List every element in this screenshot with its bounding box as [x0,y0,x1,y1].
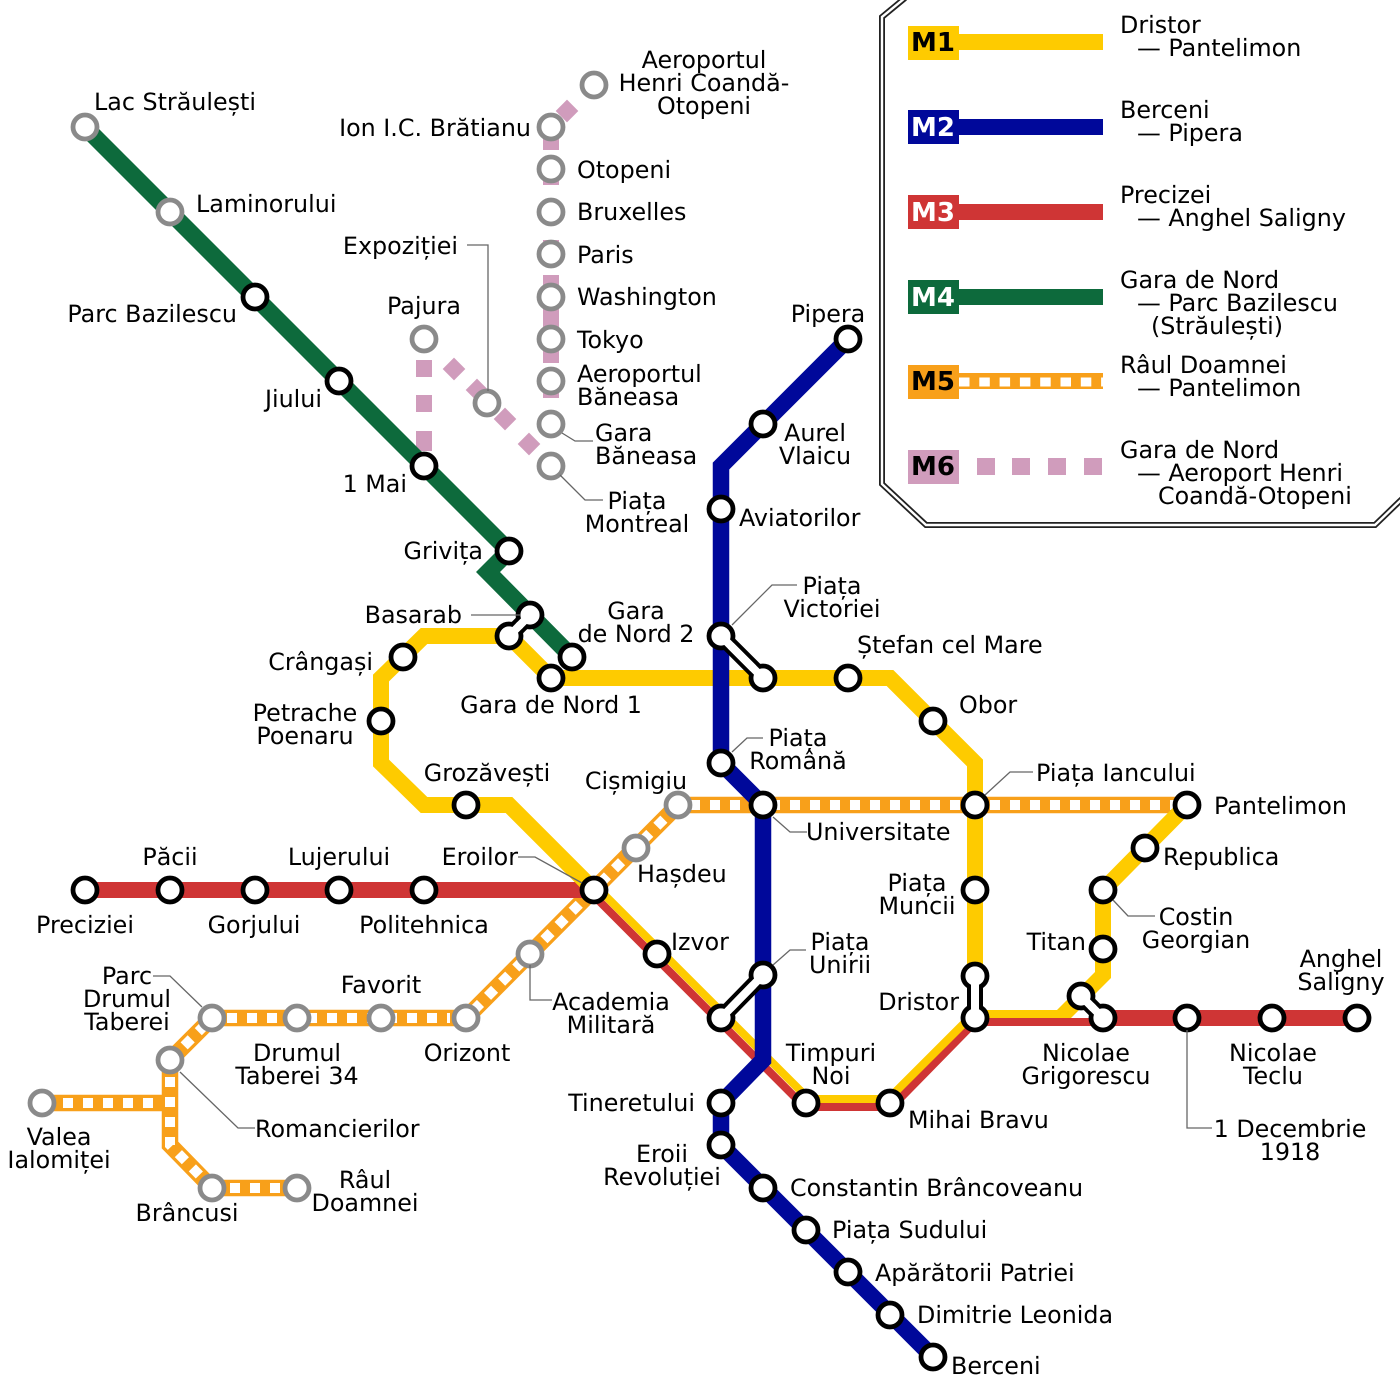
label: Ștefan cel Mare: Ștefan cel Mare [857,631,1043,659]
label: Costin Georgian [1113,900,1250,954]
label: Parc Drumul Taberei: Parc [102,962,152,990]
label: Otopeni: Otopeni [577,156,671,184]
inner fill for interchange connectors [509,615,1103,1018]
label: Romancierilor [180,1072,420,1143]
label: Piața Muncii: Piața [888,869,946,897]
label: Bruxelles: Bruxelles [577,198,686,226]
label: Aviatorilor: Aviatorilor [739,504,861,532]
legend row: M6: — Aeroport Henri [1137,459,1343,487]
label: Washington: Washington [577,283,717,311]
label: Basarab: Basarab [365,601,462,629]
label: 1 Mai: 1 Mai [343,470,407,498]
label: Academia Militară: Academia [552,988,670,1016]
legend row: M3 [908,181,1346,232]
legend row: M1 [908,11,1301,62]
label: Râul Doamnei: Râul [339,1166,391,1194]
label: Lujerului: Lujerului [288,843,390,871]
label: Dristor: Dristor [878,988,959,1016]
label: Piața Română [732,724,847,775]
label: Pajura: Pajura [387,292,461,320]
label: Crângași: Crângași [268,648,373,676]
label: Nicolae Teclu: Teclu [1242,1062,1303,1090]
label: Republica: Republica [1163,843,1279,871]
legend row: M5: M5 [911,367,955,397]
label: Piața Sudului: Piața Sudului [832,1216,987,1244]
label: Ion I.C. Brătianu: Ion I.C. Brătianu [339,114,531,142]
label: Piața Română: Piața [769,724,827,752]
legend row: M1: M1 [911,28,955,58]
label: Drumul Taberei 34: Drumul [253,1039,341,1067]
legend row: M6: M6 [911,452,955,482]
label: Aurel Vlaicu: Vlaicu [779,442,851,470]
legend row: M6: Gara de Nord [1120,436,1279,464]
legend border (double line) [882,0,1400,525]
label: Gara de Nord 2: de Nord 2 [578,620,694,648]
label: Grivița: Grivița [404,537,483,565]
label: Hașdeu: Hașdeu [637,860,727,888]
label: Piața Unirii [773,928,871,979]
legend row: M5: — Pantelimon [1137,374,1301,402]
line M4 (green) [85,127,572,657]
line M6 (pink, planned) [416,100,578,455]
stations: M4 (black) [243,285,584,669]
legend row: M4: — Parc Bazilescu [1137,289,1338,317]
label: Cișmigiu: Cișmigiu [585,767,687,795]
label: Gara de Nord 2: Gara [607,597,665,625]
label: Nicolae Grigorescu: Grigorescu [1022,1062,1150,1090]
panel: legend [882,0,1400,525]
label: Petrache Poenaru: Poenaru [256,722,354,750]
line M1 shared section (yellow) [597,887,973,1099]
line M2 (blue) [721,339,933,1357]
label: Laminorului: Laminorului [196,190,336,218]
label: Romancierilor: Romancierilor [255,1115,420,1143]
label: Eroilor: Eroilor [442,843,518,871]
label: Obor: Obor [959,691,1017,719]
label: Orizont: Orizont [424,1039,510,1067]
label: Gara de Nord 1: Gara de Nord 1 [460,691,642,719]
label: Constantin Brâncoveanu: Constantin Brâncoveanu [790,1174,1083,1202]
label: Aeroportul Băneasa: Băneasa [577,383,679,411]
label: Gara Băneasa [562,419,697,470]
label: Pantelimon: Pantelimon [1214,792,1347,820]
legend row: M5 [908,351,1301,402]
label: Drumul Taberei 34: Taberei 34 [234,1062,359,1090]
legend row: M4: Gara de Nord [1120,266,1279,294]
label: Grozăvești: Grozăvești [424,759,550,787]
legend row: M2: — Pipera [1137,119,1243,147]
legend row: M2: M2 [911,113,955,143]
line M3 (red) [85,890,1357,1018]
label: Aeroportul Băneasa: Aeroportul [577,360,702,388]
legend row: M4: M4 [911,283,955,313]
label: Anghel Saligny: Saligny [1297,968,1385,996]
stations: M3 (black) [73,878,1369,1115]
label: Piața Română: Română [749,747,847,775]
label: Academia Militară [530,965,670,1039]
legend row: M2: Berceni [1120,96,1210,124]
label: Timpuri Noi: Noi [812,1062,850,1090]
label: Piața Iancului: Piața Iancului [1036,759,1196,787]
label: 1 Decembrie 1918 [1187,1030,1366,1166]
label: Gara Băneasa: Băneasa [595,442,697,470]
label: Academia Militară: Militară [567,1011,655,1039]
legend row: M4: (Străulești) [1151,312,1283,340]
label: Nicolae Grigorescu: Nicolae [1042,1039,1130,1067]
label: Parc Drumul Taberei: Drumul [83,985,171,1013]
label: Timpuri Noi: Timpuri [785,1039,876,1067]
label: Tineretului: Tineretului [567,1089,695,1117]
label: Gara Băneasa: Gara [595,419,652,447]
label: Politehnica: Politehnica [359,911,489,939]
line M5 (orange, striped) [42,805,1187,1188]
label: Lac Străulești: Lac Străulești [94,88,256,116]
legend row: M6: Coandă-Otopeni [1158,482,1352,510]
label: Valea Ialomiței: Ialomiței [7,1146,111,1174]
legend row: M2 [908,96,1243,147]
label: Paris: Paris [577,241,634,269]
legend row: M1: — Pantelimon [1137,34,1301,62]
label: Parc Drumul Taberei: Taberei [83,1008,170,1036]
legend row: M5: Râul Doamnei [1120,351,1287,379]
label: Apărătorii Patriei: Apărătorii Patriei [875,1259,1075,1287]
label: Gorjului: Gorjului [208,911,300,939]
label: Eroii Revoluției: Revoluției [603,1163,721,1191]
label: Izvor: Izvor [671,928,729,956]
label: Preciziei: Preciziei [36,911,134,939]
label: Titan: Titan [1026,928,1086,956]
label: Aeroportul Henri Coandă-Otopeni: Henri Coandă- [619,69,789,97]
label: Piața Montreal: Montreal [585,510,689,538]
label: Aeroportul Henri Coandă-Otopeni: Aeroportul [642,46,766,74]
label: Aeroportul Henri Coandă-Otopeni: Otopeni [657,92,751,120]
label: Berceni: Berceni [951,1352,1041,1380]
label: Pipera: Pipera [791,300,865,328]
label: Parc Bazilescu: Parc Bazilescu [67,300,237,328]
legend row: M6 [908,436,1352,510]
label: Petrache Poenaru: Petrache [253,699,357,727]
legend row: M3: Precizei [1120,181,1211,209]
label: Jiului: Jiului [263,385,322,413]
legend row: M3: M3 [911,198,955,228]
label: Eroii Revoluției: Eroii [636,1140,688,1168]
label: Piața Unirii: Unirii [809,951,871,979]
label: Piața Unirii: Piața [811,928,869,956]
label: Expoziției [343,232,488,391]
line M1 (yellow) [381,636,1187,1018]
label: 1 Decembrie 1918: 1 Decembrie [1214,1115,1366,1143]
label: Expoziției: Expoziției [343,232,458,260]
label: Dimitrie Leonida: Dimitrie Leonida [917,1301,1113,1329]
legend row: M1: Dristor [1120,11,1201,39]
label: Nicolae Teclu: Nicolae [1229,1039,1317,1067]
label: Piața Iancului [985,759,1196,795]
label: Aurel Vlaicu: Aurel [784,419,846,447]
label: Eroilor [442,843,582,883]
label: Piața Muncii: Muncii [878,892,956,920]
label: Mihai Bravu: Mihai Bravu [908,1106,1049,1134]
label: Tokyo: Tokyo [576,326,644,354]
label: Râul Doamnei: Doamnei [312,1189,418,1217]
legend row: M4 [908,266,1338,340]
label: Piața Montreal [560,475,689,538]
label: Păcii: Păcii [142,843,198,871]
label: Anghel Saligny: Anghel [1300,945,1382,973]
label: Costin Georgian: Georgian [1142,926,1250,954]
stations: M6 and M4 planned (grey) [73,73,606,478]
line M1 curve from Dristor to Titan (yellow) [973,960,1111,1018]
label: Favorit: Favorit [341,971,421,999]
label: Costin Georgian: Costin [1159,903,1233,931]
label: Piața Victoriei [732,572,880,625]
label: Piața Victoriei: Piața [803,572,861,600]
stations: M2 (black) [709,327,945,1369]
label: Universitate: Universitate [806,818,951,846]
stations: M5 (grey) [30,793,690,1200]
label: Piața Victoriei: Victoriei [784,595,880,623]
line M3 shared section (red) [591,893,1103,1107]
interchange connectors [509,615,1103,1018]
label: Valea Ialomiței: Valea [27,1123,91,1151]
stations: M1 (black) [369,603,1199,1008]
label: Piața Montreal: Piața [608,487,666,515]
label: Parc Drumul Taberei [83,962,202,1036]
label: 1 Decembrie 1918: 1918 [1260,1138,1320,1166]
legend row: M3: — Anghel Saligny [1137,204,1346,232]
label: Brâncusi: Brâncusi [136,1199,238,1227]
